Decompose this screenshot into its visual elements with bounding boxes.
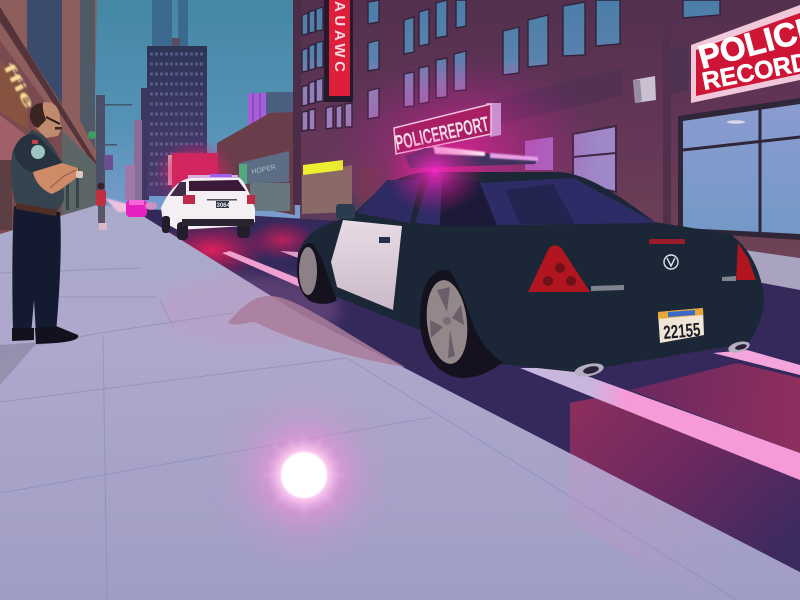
sidewalk pink tint near curb [160, 275, 340, 345]
police officer [11, 102, 83, 344]
belt [16, 203, 57, 216]
building windows [302, 0, 720, 131]
background truck with red glow [163, 148, 227, 196]
license plate: 22155 [663, 320, 702, 344]
trunk trim [591, 239, 736, 291]
right sidewalk [745, 250, 800, 290]
road lane markings [222, 251, 800, 480]
shoes [12, 328, 34, 341]
license plate [658, 308, 704, 344]
mid building with storefront [217, 112, 295, 215]
shoulder patch [31, 145, 45, 159]
police light bar [405, 146, 538, 168]
road [130, 208, 800, 572]
taillight left [528, 245, 590, 292]
right building facade [293, 0, 800, 258]
glasses [46, 117, 60, 124]
vertical red sign [324, 0, 353, 102]
car shadow on sidewalk [228, 296, 405, 367]
white police SUV [161, 174, 255, 240]
sign: police report [393, 103, 501, 155]
sign: police report: POLICEREPORT [393, 113, 491, 155]
forearms [33, 163, 79, 194]
pavement shadow under officer [0, 342, 40, 385]
side mirror [336, 204, 355, 219]
front wheel [297, 243, 337, 304]
left building [0, 0, 132, 234]
sleeve [14, 134, 63, 173]
red road glow [157, 220, 317, 278]
magenta glow on facade [330, 55, 600, 245]
car body [297, 172, 764, 372]
car badge [664, 255, 678, 269]
pedestrian in red [96, 182, 107, 230]
distant skyscrapers [125, 0, 294, 200]
mid building with storefront: HOPER [251, 164, 277, 176]
police car [297, 172, 764, 379]
door panel [331, 220, 402, 310]
exhaust pipes [573, 361, 605, 379]
rear wheel [420, 270, 503, 378]
moustache [55, 127, 62, 130]
mid storefront windows [302, 126, 616, 214]
magenta light glow [385, 130, 485, 214]
road reflection patches [570, 363, 800, 600]
left building: ffie [0, 60, 38, 112]
side windows [357, 180, 420, 223]
vertical red sign: AUAWC [331, 1, 348, 72]
distant pink car [105, 198, 157, 217]
hand [76, 171, 83, 178]
sidewalk paving joints [0, 268, 737, 600]
white police SUV: 3064 [216, 203, 231, 209]
sky [90, 0, 300, 230]
taillight right [736, 243, 756, 280]
wall vent box [633, 76, 656, 103]
big window frame and glass [678, 98, 800, 240]
shirt [11, 130, 64, 212]
head [34, 102, 62, 138]
sign: police record [691, 5, 800, 103]
pillar [440, 178, 497, 226]
sidewalk [0, 205, 800, 600]
trousers [12, 206, 61, 335]
rear window [480, 178, 657, 225]
ground light orb [209, 380, 399, 570]
